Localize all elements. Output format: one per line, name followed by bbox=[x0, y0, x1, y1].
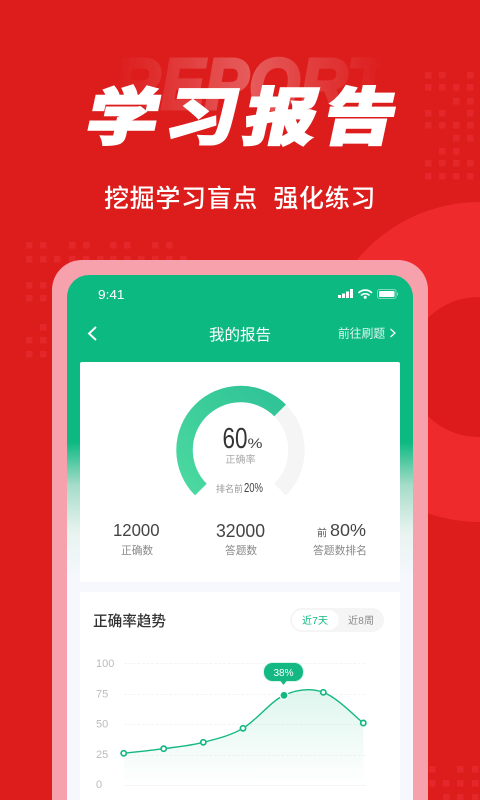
icon: link arrow bbox=[390, 329, 395, 337]
stat: correct count bbox=[113, 520, 160, 557]
dot pattern: left bbox=[26, 242, 186, 358]
stat: answered count bbox=[216, 521, 265, 557]
stat: rank: 80% bbox=[330, 520, 366, 540]
navigation bar bbox=[89, 326, 395, 344]
phone mockup bbox=[52, 260, 428, 800]
phone frame bbox=[52, 260, 428, 800]
y axis labels: 50 bbox=[96, 718, 108, 730]
line chart bbox=[96, 658, 366, 791]
gauge track bbox=[280, 410, 297, 490]
stat: answered count: 32000 bbox=[216, 521, 265, 541]
y axis labels bbox=[96, 658, 114, 791]
card background bbox=[80, 592, 400, 800]
stat: correct count: 12000 bbox=[113, 520, 160, 540]
subtitle: 挖掘学习盲点 强化练习 bbox=[104, 185, 376, 213]
tooltip bbox=[263, 662, 304, 685]
icon: battery bbox=[378, 290, 398, 298]
icon: wifi bbox=[359, 290, 372, 298]
stat: rank: 答题数排名 bbox=[313, 543, 367, 557]
watermark: REPORT: REPORT bbox=[113, 45, 393, 125]
chart heading: 正确率趋势 bbox=[93, 613, 166, 630]
rank label: 排名前 bbox=[216, 483, 243, 494]
nav link: 前往刷题 bbox=[338, 326, 385, 340]
dot pattern: bottom right bbox=[429, 766, 478, 800]
toggle: 近8周 bbox=[348, 614, 374, 627]
card background bbox=[80, 362, 400, 582]
toggle bbox=[290, 608, 384, 632]
gauge percent sign: % bbox=[248, 435, 262, 451]
phone screen bbox=[67, 275, 413, 800]
panel: accuracy trend bbox=[80, 592, 400, 800]
stat: answered count: 答题数 bbox=[225, 544, 257, 557]
icon: back arrow bbox=[89, 327, 96, 340]
y axis labels: 75 bbox=[96, 688, 108, 700]
decorative large circle bbox=[320, 202, 480, 522]
toggle: 近7天 bbox=[302, 614, 328, 627]
y axis labels: 0 bbox=[96, 779, 102, 791]
stat: rank bbox=[313, 520, 367, 557]
gauge percent: 60 bbox=[222, 423, 248, 455]
gauge bbox=[185, 394, 297, 495]
decorative inner circle bbox=[408, 297, 480, 437]
icon: signal bbox=[338, 289, 353, 298]
tooltip: 38% bbox=[273, 668, 294, 679]
panel: accuracy summary bbox=[80, 362, 400, 582]
gauge value bbox=[185, 394, 280, 490]
dot pattern: top right bbox=[425, 72, 474, 180]
stat: correct count: 正确数 bbox=[121, 544, 153, 557]
data points bbox=[121, 690, 366, 756]
y axis labels: 25 bbox=[96, 749, 108, 761]
area fill bbox=[124, 690, 363, 785]
highlighted point bbox=[280, 691, 288, 699]
trend line bbox=[124, 690, 363, 753]
gauge label: 正确率 bbox=[226, 453, 256, 466]
status bar bbox=[98, 287, 398, 302]
title: 学习报告 bbox=[79, 67, 414, 158]
stat: rank: 前 bbox=[317, 526, 327, 540]
y axis labels: 100 bbox=[96, 658, 114, 670]
clock: 9:41 bbox=[98, 287, 124, 302]
rank value: 20% bbox=[244, 481, 263, 495]
nav title: 我的报告 bbox=[209, 326, 271, 344]
